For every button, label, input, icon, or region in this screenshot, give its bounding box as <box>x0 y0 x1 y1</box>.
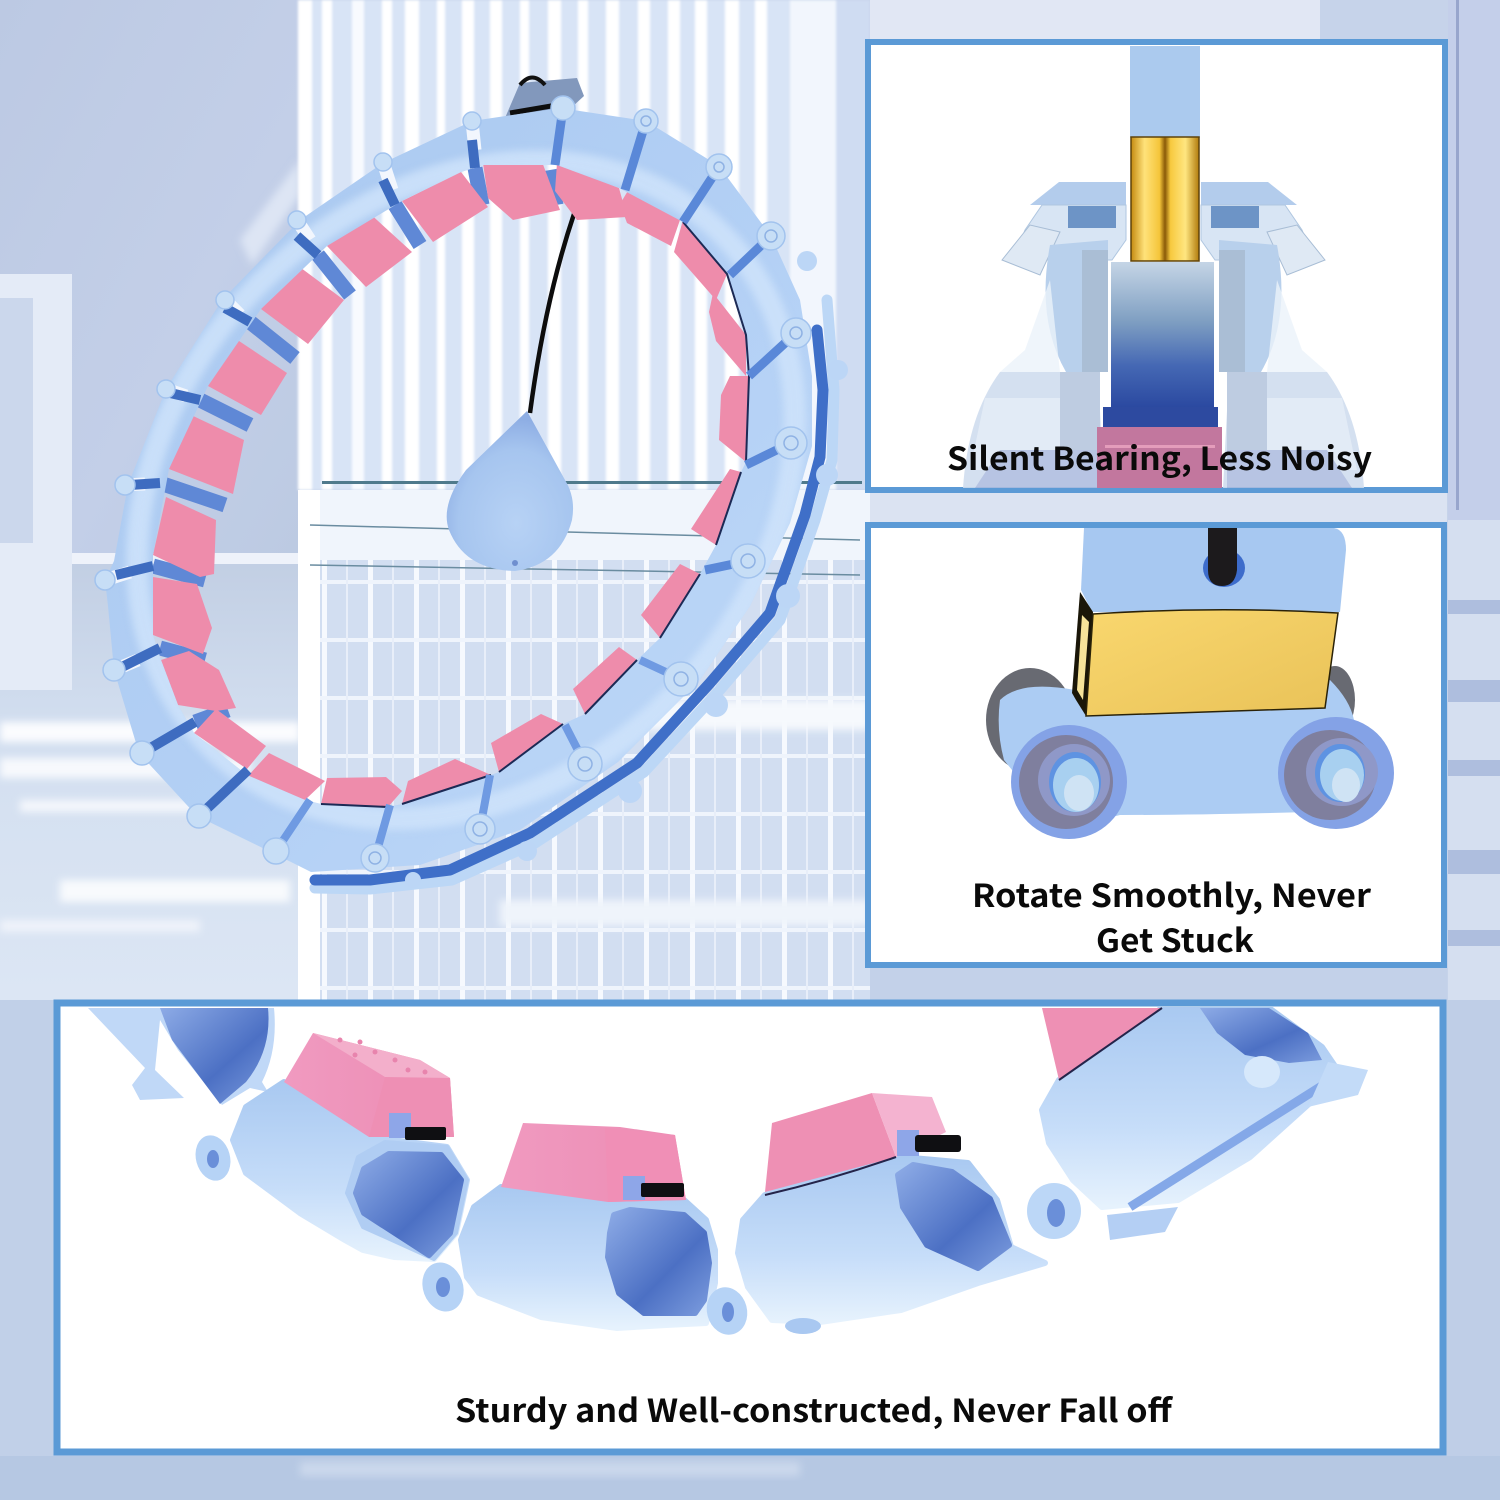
wheels: rear dark rollers <box>986 666 1355 772</box>
edge rail <box>1130 1075 1339 1207</box>
caption: rotate smoothly: Rotate Smoothly, Never <box>972 871 1371 917</box>
hoop: knob caps <box>369 116 802 864</box>
opening <box>356 1154 461 1255</box>
left lug <box>196 1135 230 1181</box>
front left wheel <box>1011 725 1127 839</box>
segment: second whole <box>416 1123 753 1339</box>
caption: silent bearing: Silent Bearing, Less Noisy <box>947 434 1372 480</box>
upper block <box>1081 528 1346 612</box>
pink pad <box>765 1093 896 1192</box>
segment: partial top-left <box>88 1008 275 1105</box>
bearing: pink pad <box>1097 427 1222 488</box>
bearing: transparent housing right <box>1201 182 1364 488</box>
gold collar side <box>1072 592 1093 716</box>
hoop: main product ring <box>94 76 848 894</box>
bottom tab <box>785 1318 821 1334</box>
room details left <box>0 160 300 932</box>
hoop: blue segments ring <box>105 108 812 872</box>
panel: smooth rotation <box>868 525 1444 965</box>
hoop: outer tabs <box>405 251 848 888</box>
hoop: segment highlight <box>124 148 806 831</box>
cord through slot <box>1203 528 1245 587</box>
pink pad <box>1042 1008 1162 1080</box>
right tab <box>1308 1062 1368 1107</box>
shell <box>1042 1008 1341 1207</box>
bearing: transparent housing left <box>963 182 1126 488</box>
rim <box>347 1142 467 1259</box>
opening <box>608 1210 709 1313</box>
panel: silent bearing <box>868 42 1445 490</box>
hoop: pad edge shadow <box>321 222 749 807</box>
hoop: cord <box>530 214 574 413</box>
pink pad <box>284 1033 454 1137</box>
clip <box>623 1176 645 1200</box>
clip <box>897 1130 919 1156</box>
caption: rotate smoothly: Get Stuck <box>1096 916 1255 962</box>
panel: sturdy construction <box>57 1003 1443 1452</box>
caption: rotate smoothly <box>972 871 1371 962</box>
shell <box>461 1187 715 1328</box>
lug right <box>706 1287 748 1335</box>
lug <box>1027 1183 1081 1239</box>
weighted ball <box>447 411 573 571</box>
bottom tab <box>1107 1207 1178 1240</box>
hoop: top clip <box>505 78 584 118</box>
hoop: pink massage pads <box>153 159 749 807</box>
caption: sturdy: Sturdy and Well-constructed, Never Fall off <box>455 1386 1174 1432</box>
opening <box>898 1165 1009 1268</box>
opening <box>1200 1008 1322 1063</box>
axle base <box>998 680 1354 816</box>
bearing: central roller <box>1111 262 1214 410</box>
shell <box>738 1157 1045 1322</box>
gold collar face <box>1086 610 1338 716</box>
hoop: knobs <box>95 96 811 872</box>
front right wheel <box>1278 717 1394 829</box>
segment: third whole <box>738 1093 1045 1334</box>
hoop: blue track and rim <box>315 300 834 889</box>
hoop: segment connectors <box>105 108 796 858</box>
right margin <box>1448 0 1500 520</box>
bearing: gold sleeve <box>1131 137 1199 261</box>
segment: first whole <box>191 1033 467 1259</box>
shell <box>233 1082 467 1259</box>
segment: fourth top-right <box>1027 1008 1368 1240</box>
clip <box>389 1113 411 1138</box>
hoop: connector links behind pads <box>153 168 556 722</box>
left lug <box>422 1262 464 1312</box>
glass wall <box>298 0 870 490</box>
pink pad <box>501 1123 686 1202</box>
bearing: blue stem <box>1130 46 1200 138</box>
